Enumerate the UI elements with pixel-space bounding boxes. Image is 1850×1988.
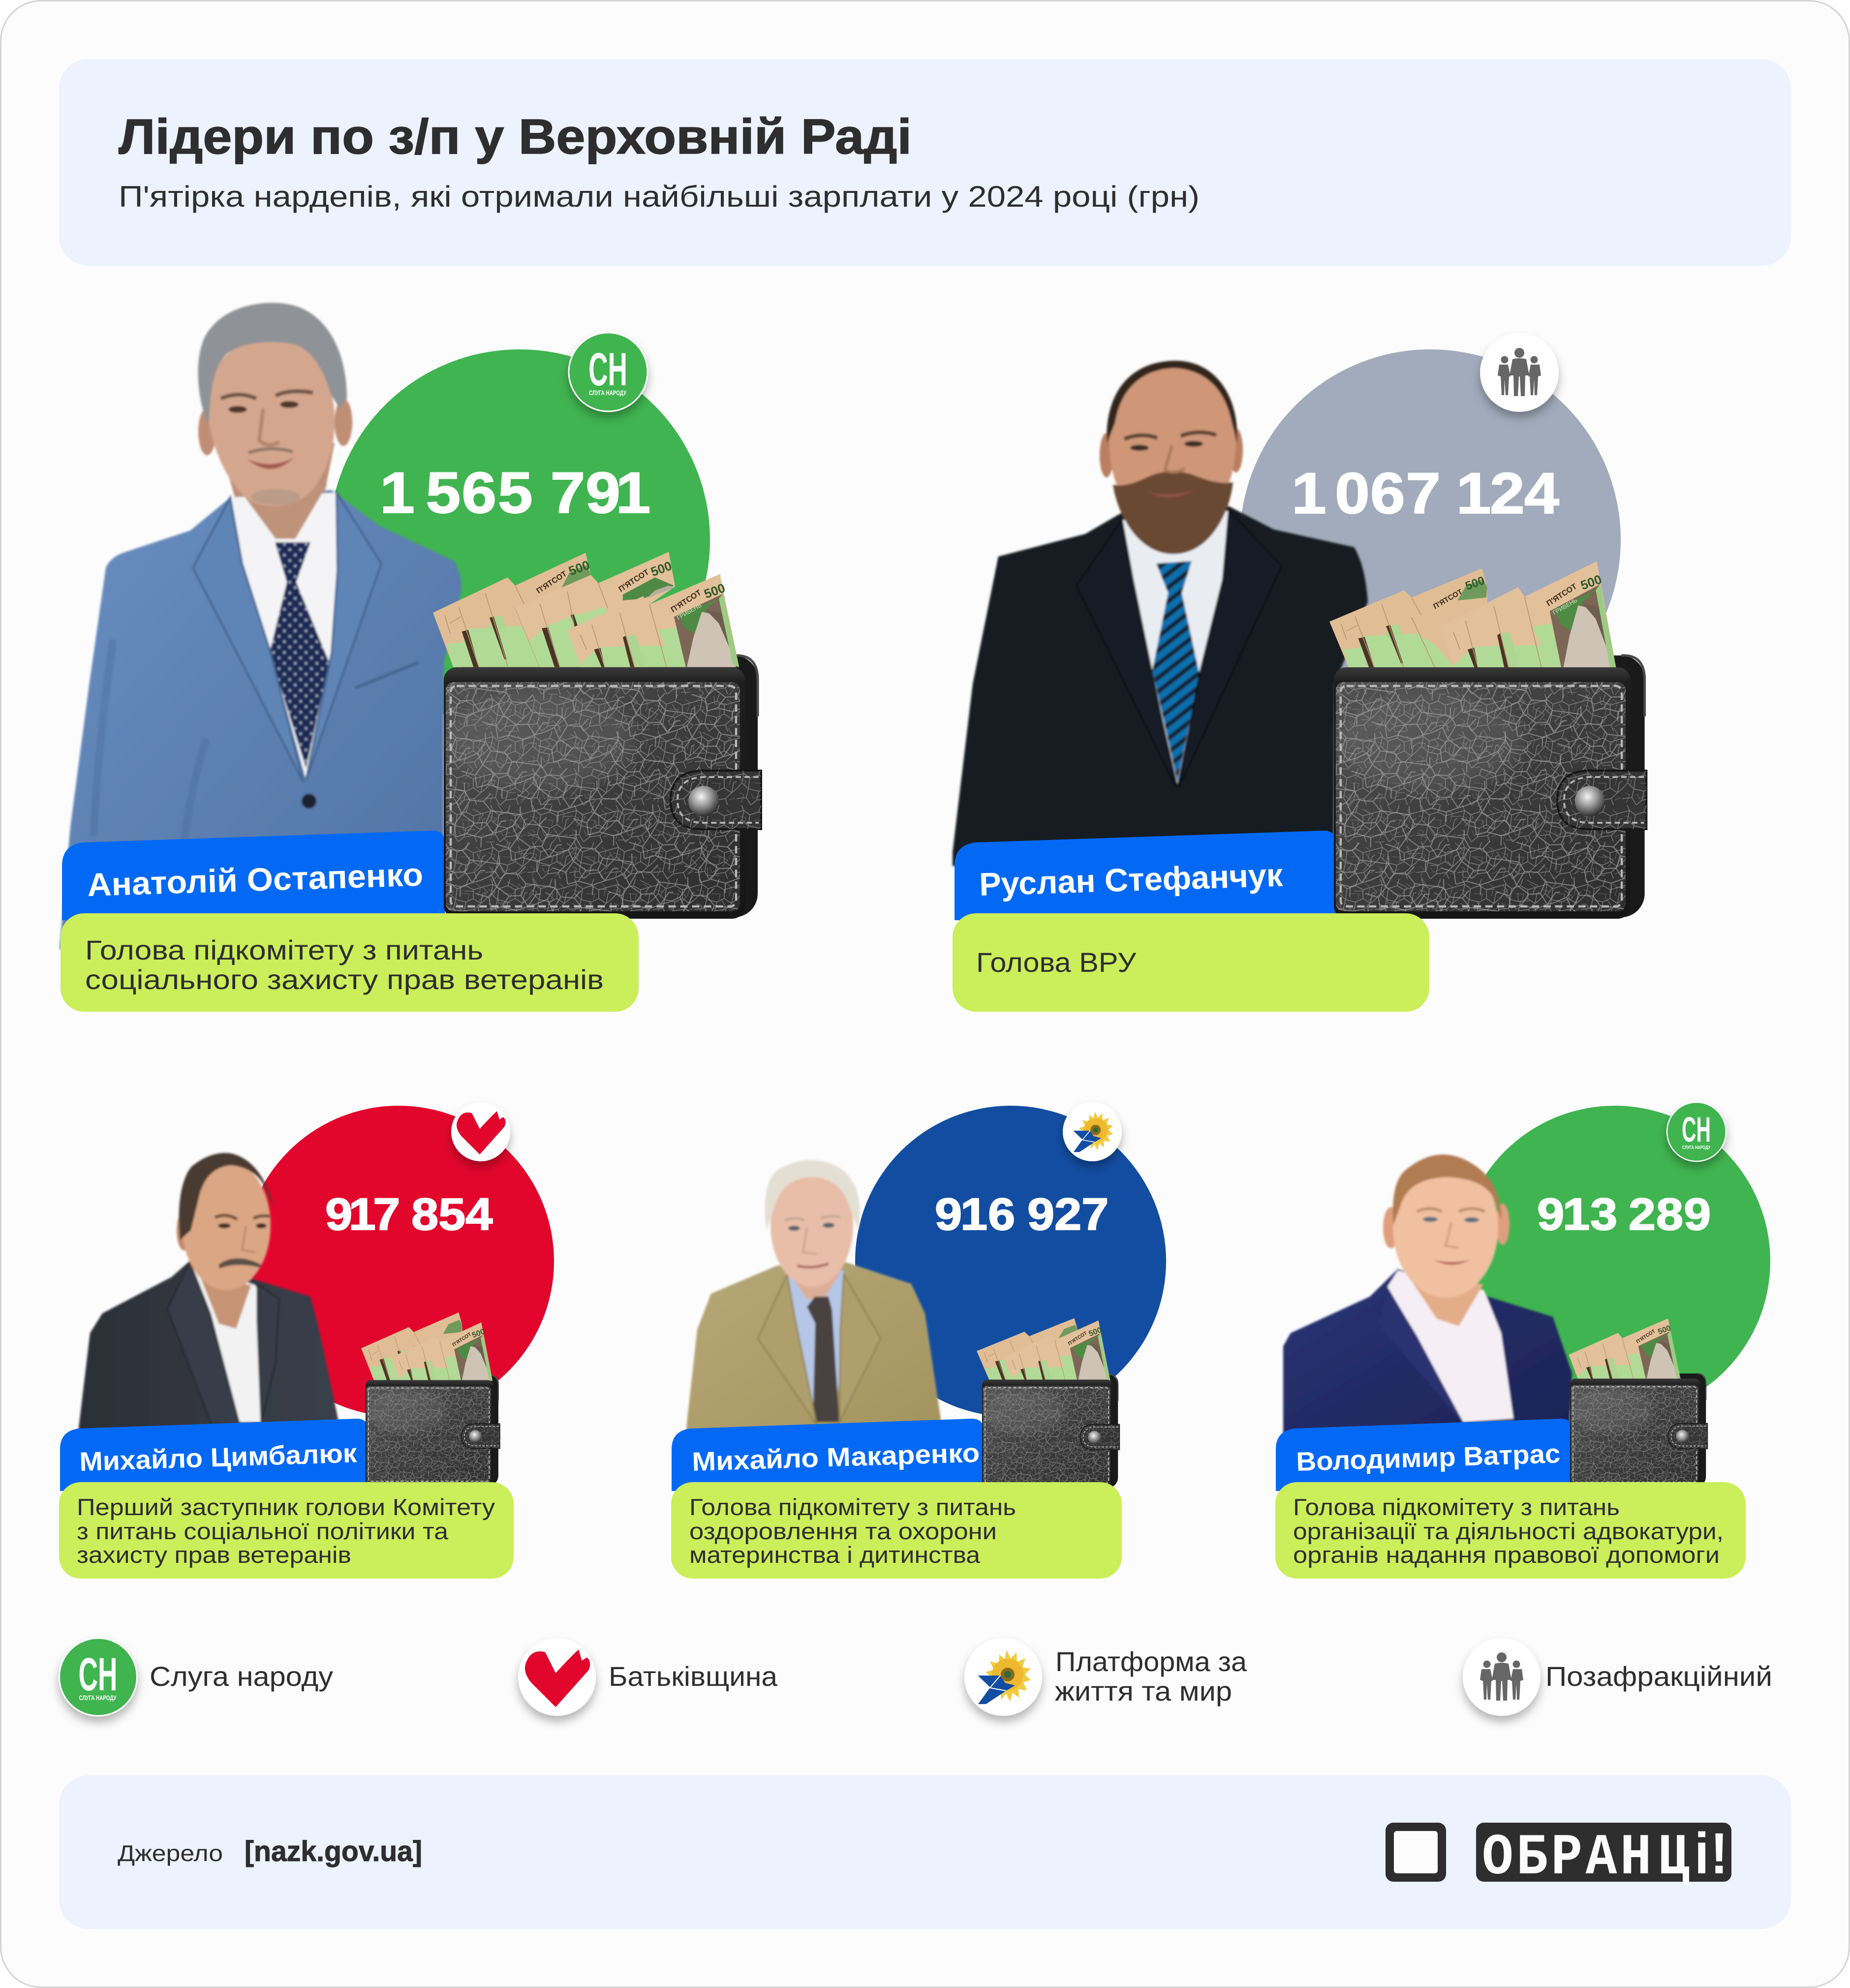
wallet xyxy=(1334,667,1646,919)
banknotes xyxy=(977,1318,1110,1381)
wallet xyxy=(444,667,761,919)
banknotes xyxy=(433,552,739,667)
role box: організації та діяльності адвокатури, xyxy=(1293,1518,1724,1544)
panel: Володимир Ватрас xyxy=(1275,1102,1770,1579)
party badge: Батьківщина xyxy=(451,1102,510,1161)
header panel xyxy=(59,59,1791,266)
role box: Перший заступник голови Комітету xyxy=(77,1494,495,1520)
legend item: Батьківщина: Батьківщина xyxy=(609,1661,778,1692)
role box: соціального захисту прав ветеранів xyxy=(85,964,604,995)
logo: wordmark: і! xyxy=(1695,1821,1728,1886)
banknotes: 500 xyxy=(566,558,591,579)
panel: Руслан Стефанчук xyxy=(953,333,1646,1012)
legend item: Слуга народу: СЛУГА НАРОДУ xyxy=(79,1694,117,1702)
role box: захисту прав ветеранів xyxy=(77,1542,351,1568)
salary circle xyxy=(855,1106,1166,1417)
salary number: 916 927 xyxy=(935,1189,1109,1240)
banknotes: 500 xyxy=(1088,1326,1103,1338)
source link text: [nazk.gov.ua] xyxy=(245,1835,422,1867)
wallet xyxy=(366,1380,500,1487)
title: Лідери по з/п у Верховній Раді xyxy=(119,109,912,164)
banknotes: П'ЯТСОТ xyxy=(617,568,651,594)
party badge: Позафракційний xyxy=(1480,333,1559,412)
banknotes: П'ЯТСОТ xyxy=(1432,588,1464,611)
banknotes: 500 xyxy=(1463,574,1486,593)
party badge: Слуга народу: СЛУГА НАРОДУ xyxy=(589,389,626,397)
name ribbon: Михайло Цимбалюк xyxy=(79,1438,358,1477)
party badge: Слуга народу: СН xyxy=(588,343,627,396)
legend item: Платформа за життя та мир xyxy=(964,1638,1247,1716)
banknotes: П'ЯТСОТ xyxy=(1067,1331,1088,1347)
legend item: Платформа за життя та мир: життя та мир xyxy=(1055,1676,1232,1707)
subtitle: П'ятірка нардепів, які отримали найбільші зарплати у 2024 році (грн) xyxy=(119,180,1200,213)
role box xyxy=(671,1482,1122,1579)
name ribbon xyxy=(672,1419,984,1491)
wallet xyxy=(982,1380,1119,1489)
footer panel xyxy=(59,1775,1791,1929)
salary number: 917 854 xyxy=(325,1189,493,1240)
portrait: Ватрас xyxy=(1283,1154,1572,1442)
salary circle xyxy=(1240,349,1621,730)
banknotes xyxy=(361,1312,493,1381)
party badge: Слуга народу xyxy=(569,333,648,411)
role box: органів надання правової допомоги xyxy=(1293,1542,1720,1568)
banknotes: П'ЯТСОТ xyxy=(670,589,703,614)
name ribbon: Володимир Ватрас xyxy=(1295,1439,1561,1477)
wallet xyxy=(1570,1379,1707,1488)
party badge: Слуга народу: СН xyxy=(1682,1111,1711,1149)
salary number: 913 289 xyxy=(1537,1189,1711,1240)
name ribbon: Руслан Стефанчук xyxy=(979,857,1284,902)
salary number: 1 565 791 xyxy=(380,461,650,526)
portrait: Макаренко xyxy=(686,1160,941,1442)
legend item: Слуга народу: СН xyxy=(79,1648,117,1701)
role box: Голова підкомітету з питань xyxy=(689,1494,1016,1520)
legend item: Слуга народу xyxy=(59,1638,333,1716)
role box: оздоровлення та охорони xyxy=(689,1518,997,1544)
role box xyxy=(61,913,639,1012)
salary circle xyxy=(1459,1106,1770,1417)
role box xyxy=(59,1482,514,1579)
role box xyxy=(1275,1482,1746,1579)
logo: square mark xyxy=(1386,1823,1446,1882)
logo: wordmark: ОБРАНЦ xyxy=(1482,1825,1689,1891)
role box: Голова ВРУ xyxy=(976,947,1136,978)
name ribbon xyxy=(1276,1419,1572,1491)
banknotes: ГРИВЕНЬ xyxy=(676,602,703,621)
legend xyxy=(59,1638,1772,1716)
banknotes: ГРИВЕНЬ xyxy=(1551,596,1578,616)
banknotes xyxy=(1329,561,1616,670)
name ribbon xyxy=(955,831,1336,920)
banknotes: П'ЯТСОТ xyxy=(452,1332,472,1348)
banknotes: 500 xyxy=(1578,572,1603,593)
role box: материнства і дитинства xyxy=(689,1542,981,1568)
portrait: Остапенко xyxy=(60,303,461,949)
role box: з питань соціальної політики та xyxy=(77,1518,449,1544)
portrait: Стефанчук xyxy=(953,361,1368,866)
banknotes: 500 xyxy=(702,580,727,601)
portrait: Цимбалюк xyxy=(79,1153,338,1442)
salary number: 1 067 124 xyxy=(1292,461,1559,526)
panel: Михайло Цимбалюк xyxy=(59,1102,554,1579)
name ribbon xyxy=(60,1419,368,1491)
legend item: Батьківщина xyxy=(518,1638,778,1716)
panel: Анатолій Остапенко xyxy=(60,303,761,1012)
source label: Джерело xyxy=(118,1840,223,1866)
party badge: Слуга народу xyxy=(1667,1102,1726,1161)
name ribbon xyxy=(62,831,445,920)
banknotes: 500 xyxy=(471,1328,486,1340)
name ribbon: Михайло Макаренко xyxy=(691,1438,980,1477)
banknotes: П'ЯТСОТ xyxy=(1545,582,1579,608)
banknotes xyxy=(1569,1318,1681,1379)
panel: Михайло Макаренко xyxy=(671,1102,1166,1579)
party badge: Слуга народу: СЛУГА НАРОДУ xyxy=(1682,1145,1710,1150)
legend item: Слуга народу: Слуга народу xyxy=(150,1661,333,1692)
banknotes: П'ЯТСОТ xyxy=(535,570,569,595)
legend item: Позафракційний xyxy=(1463,1638,1772,1716)
banknotes: П'ЯТСОТ xyxy=(1635,1329,1656,1345)
salary circle xyxy=(329,349,710,730)
banknotes: 500 xyxy=(648,558,674,579)
legend item: Позафракційний: Позафракційний xyxy=(1545,1661,1772,1692)
name ribbon: Анатолій Остапенко xyxy=(87,856,424,903)
salary circle xyxy=(243,1106,554,1417)
party badge: Платформа за життя та мир xyxy=(1063,1102,1122,1161)
role box: Голова підкомітету з питань xyxy=(1293,1494,1620,1520)
role box xyxy=(953,913,1429,1012)
legend item: Платформа за життя та мир: Платформа за xyxy=(1055,1646,1247,1677)
banknotes: 500 xyxy=(1657,1324,1672,1336)
role box: Голова підкомітету з питань xyxy=(85,934,483,965)
